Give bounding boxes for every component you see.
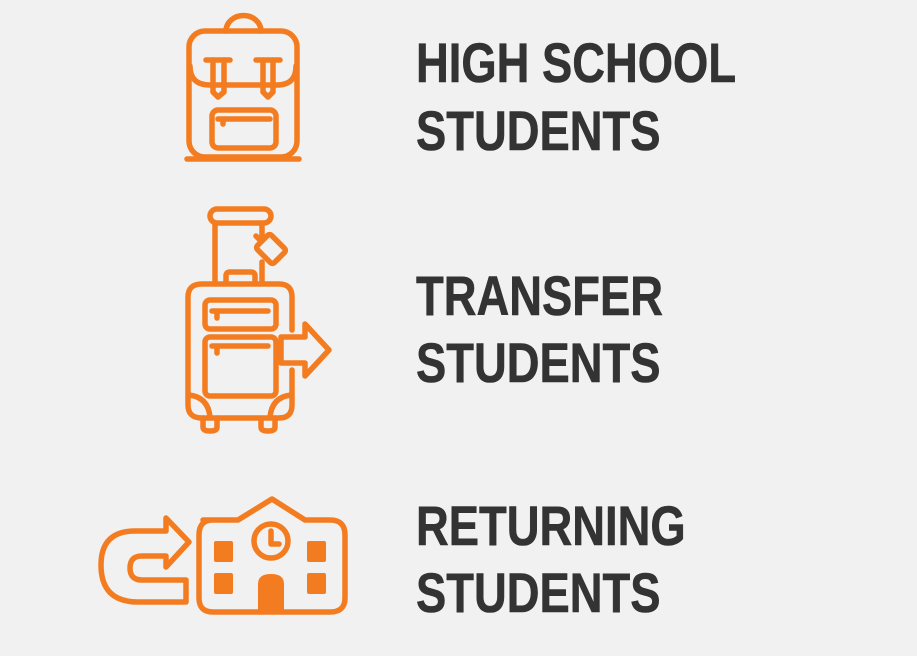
heading: high school students: HIGH SCHOOL: [416, 31, 736, 94]
icon: suitcase: [188, 209, 329, 431]
heading: high school students: STUDENTS: [416, 99, 660, 162]
heading: transfer students: [416, 264, 663, 394]
heading: transfer students: TRANSFER: [416, 264, 663, 327]
heading: transfer students: STUDENTS: [416, 331, 660, 394]
heading: returning students: STUDENTS: [416, 561, 660, 624]
heading: returning students: [416, 494, 686, 624]
heading: high school students: [416, 31, 736, 162]
icon: backpack: [187, 16, 299, 159]
heading: returning students: RETURNING: [416, 494, 686, 557]
icon: returning arrow and school: [101, 499, 345, 612]
